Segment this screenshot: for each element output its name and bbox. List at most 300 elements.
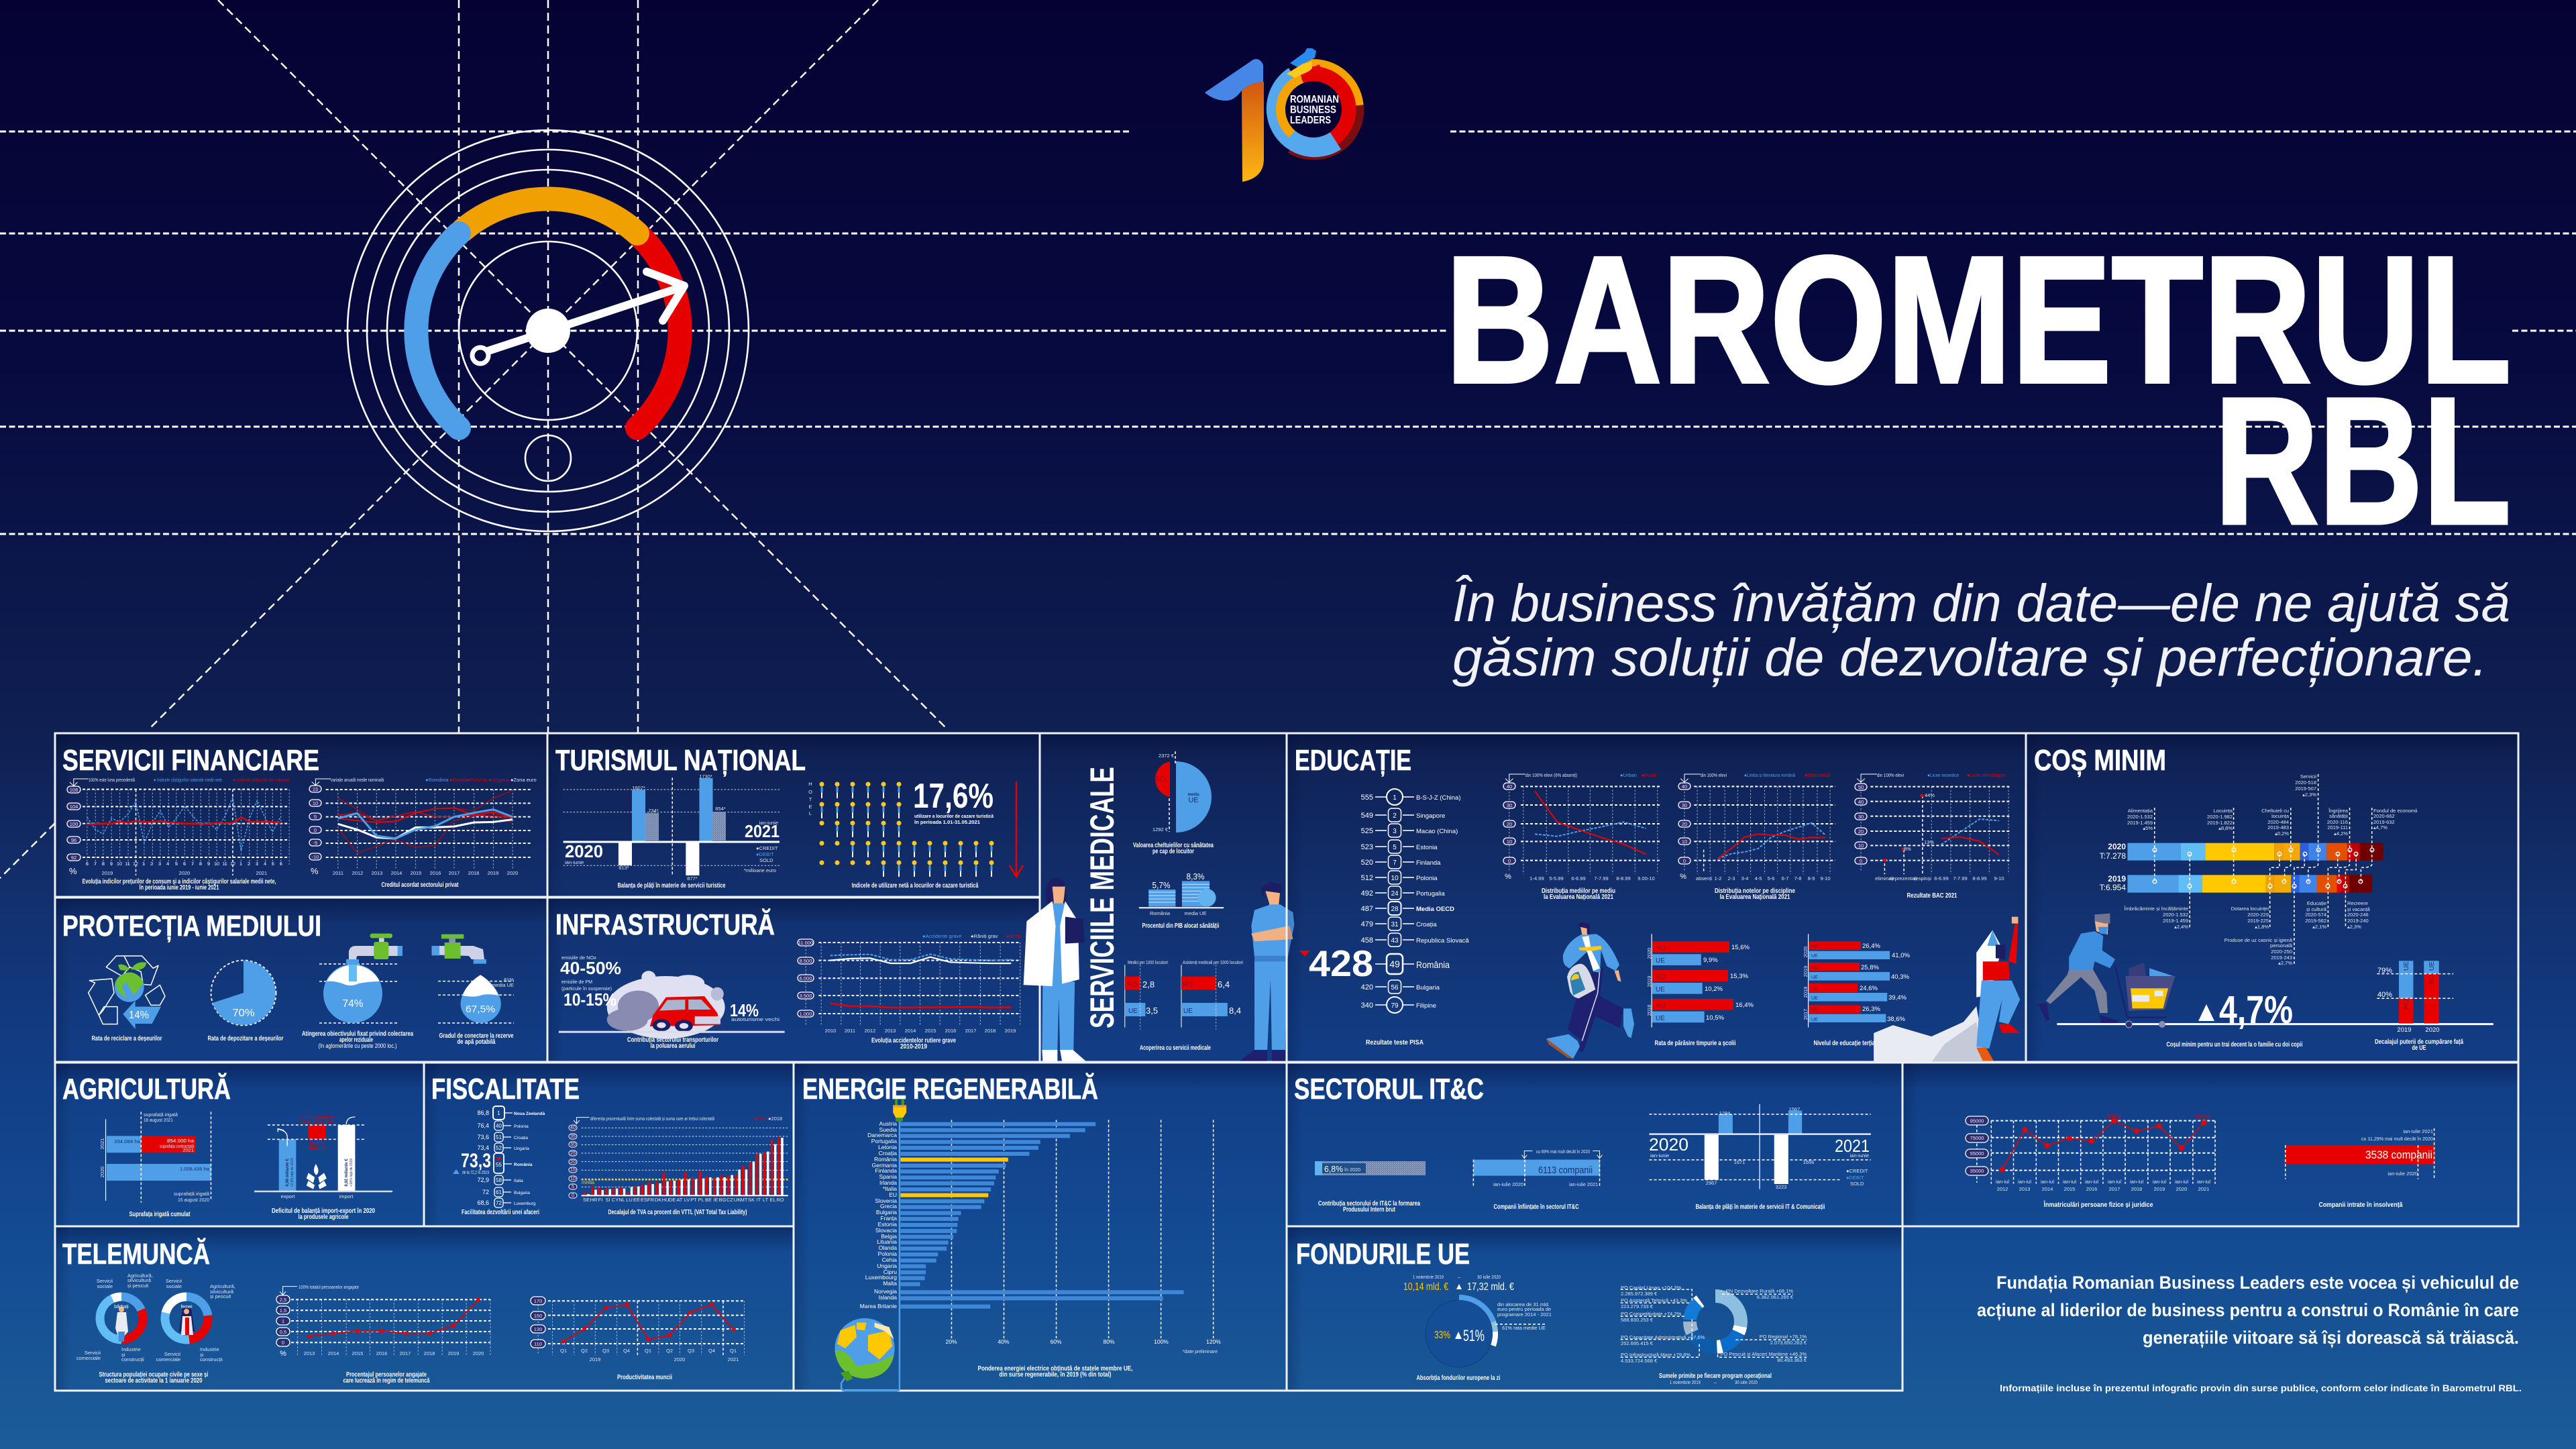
bar chart: renewable share: Croația [879, 1150, 897, 1157]
ranking: PISA results: 3 [1393, 828, 1397, 835]
donut chart: women [99, 1278, 235, 1385]
bar chart: renewable share: Marea Britanie [860, 1303, 897, 1309]
line chart: teleworking share [276, 1284, 490, 1385]
big figure 4,7%: 4,7% [2219, 988, 2293, 1032]
bar chart: irrigated area: 2021 [99, 1138, 105, 1149]
line chart: teleworking share: 2017 [400, 1350, 411, 1356]
bar chart: renewable share: 40% [998, 1338, 1010, 1345]
bar chart: VAT gap: 10 [570, 1175, 576, 1181]
blueprint guide lines [0, 0, 2576, 878]
donut chart: operational programs: 6.362.061.265 € [1757, 1294, 1794, 1300]
bar chart: renewable share: Irlanda [879, 1179, 897, 1186]
line chart: registrations: ian-iul [2041, 1179, 2054, 1185]
line chart: road accidents: 2012 [865, 1028, 875, 1034]
line chart: credit: 5 [314, 814, 317, 820]
line chart: credit: Creditul acordat sectorului privat [381, 881, 459, 889]
footer statement [1977, 1273, 2519, 1348]
bar chart: irrigated area: suprafață irigată [174, 1191, 210, 1197]
water drop: drinking water 67.5%: de apă potabilă [458, 1038, 496, 1046]
hatched bar: GDP contribution: Contribuția sectorului de IT&C la formarea [1318, 1199, 1420, 1208]
line chart: grades by discipline: din 100% elevi [1701, 772, 1727, 778]
donut chart: men: comerciale [76, 1355, 101, 1361]
ranking: ease of doing business: 73,4 [477, 1144, 489, 1151]
bar chart: renewable share: 80% [1103, 1338, 1115, 1345]
bar chart: irrigated area: suprafața contractată [160, 1143, 195, 1149]
line chart: BAC results: ●Licee tehnologice [1967, 772, 2006, 778]
donut chart: women: silvicultură [210, 1289, 234, 1295]
half-pie chart: health spending: media [1187, 793, 1199, 797]
line chart: credit: 2017 [449, 870, 460, 876]
bar chart: IT balance of payments: 1671 [1734, 1159, 1745, 1165]
bar chart: purchasing power gap: UE [2403, 961, 2410, 971]
illustration: shopper with cart [2038, 914, 2493, 1028]
line chart: prices and wages: 10 [214, 861, 219, 867]
line chart: grades by discipline [1678, 772, 1835, 901]
line chart: road accidents: ●Morți [1006, 933, 1021, 939]
ranking: ease of doing business: 72 [482, 1189, 489, 1195]
bar chart: VAT gap: ●2012 [755, 1116, 769, 1122]
line chart: credit: 15 [313, 786, 318, 792]
line chart: grades by discipline: 7-8 [1794, 875, 1801, 881]
ranking: PISA results: Singapore [1416, 812, 1445, 820]
half-pie chart: health spending: UE [1188, 796, 1199, 804]
ranking: ease of doing business: Ungaria [514, 1146, 529, 1151]
line chart: BAC results: 13% [1924, 839, 1934, 845]
stacked bars: minimum basket: 2019-111 [2327, 824, 2348, 830]
line chart: teleworking share: 1 [282, 1318, 284, 1324]
bar chart: balance of tourism payments: Balanța de plăți în materie de servicii turistice [617, 881, 726, 890]
bar chart: renewable share: Grecia [880, 1203, 897, 1210]
stacked bars: minimum basket: ▴0,2% [2275, 830, 2289, 837]
line chart: registrations: ian-iul [2018, 1179, 2031, 1185]
stacked bars: minimum basket: 2020-116 [2327, 819, 2348, 825]
bar chart: balance of tourism payments: 1607* [632, 785, 645, 791]
bar chart: renewable share: *date preliminare [1183, 1348, 1218, 1354]
bar chart: early school leaving: RO [1656, 973, 1666, 981]
line chart: grades by discipline: % [1680, 873, 1686, 881]
line chart: national evaluation averages: 10 [1507, 839, 1512, 845]
bar chart: irrigated area: 18 august 2021 [144, 1117, 173, 1123]
line chart: teleworking share: 100% totalul persoanelor angajate [299, 1284, 359, 1290]
stacked bars: minimum basket: ▴2,1% [2312, 924, 2326, 930]
line chart: road accidents: 2014 [905, 1028, 916, 1034]
line chart: road accidents: Evoluția accidentelor rutiere grave [871, 1036, 956, 1044]
bar chart: VAT gap: ES [641, 1197, 647, 1203]
gauge donut: EU funds absorption: 51% [1463, 1327, 1485, 1345]
line chart: registrations: 2017 [2109, 1186, 2120, 1192]
heading: INFRASTRUCTURĂ [555, 908, 775, 941]
subtitle: În business învățăm din date—ele ne ajută să [1452, 573, 2510, 633]
water drop: drinking water 67.5%: media UE [492, 982, 514, 988]
bar chart: VAT gap: CY [612, 1197, 619, 1203]
stacked bars: minimum basket: 2020-1.532 [2127, 814, 2153, 820]
donut chart: operational programs: 1 noiembrie 2019 [1670, 1379, 1701, 1385]
bar chart: purchasing power gap: UE [2428, 961, 2436, 971]
line chart: prices and wages: 7 [191, 861, 194, 867]
bar chart: renewable share: 60% [1050, 1338, 1062, 1345]
ranking: PISA results: 555 [1361, 794, 1373, 802]
illustration: polluting car: emisiile de PM [561, 979, 592, 985]
stacked bars: minimum basket: locuința [2271, 813, 2290, 819]
gauge donut: EU funds absorption: 10,14 mld. € [1403, 1281, 1448, 1293]
bar chart: balance of tourism payments: ●CREDIT [756, 845, 778, 851]
donut chart: operational programs: PO Regional +78,1% [1760, 1334, 1807, 1340]
ranking: ease of doing business: Croația [514, 1136, 528, 1140]
footer statement: generațiile viitoare să își dorească să trăiască. [2143, 1328, 2519, 1348]
bar chart: VAT gap: HR [590, 1197, 598, 1203]
bar chart: VAT gap: 40 [570, 1124, 576, 1130]
bar chart: IT balance of payments: 3223 [1776, 1184, 1786, 1190]
bar chart: tertiary education: 38,6% [1887, 1016, 1905, 1023]
panel: Telemunca [55, 1226, 794, 1391]
bar chart: purchasing power gap: RO [2428, 974, 2436, 985]
line chart: road accidents: 3.500 [800, 993, 812, 999]
donut chart: operational programs: PO Competitivitate +74,2% [1621, 1311, 1682, 1317]
pictogram: hotel keys: T [809, 796, 812, 802]
bar chart: IT balance of payments: 1567 [1789, 1106, 1800, 1112]
donut chart: women: sociale [166, 1283, 182, 1289]
line chart: prices and wages: 12 [133, 861, 138, 867]
line chart: prices and wages: 2021 [256, 870, 267, 876]
bar chart: VAT gap: SE [583, 1197, 590, 1203]
ranking: PISA results: 458 [1361, 936, 1373, 945]
bar chart: tertiary education: UE [1811, 1018, 1818, 1022]
icon: recycling globe [89, 956, 165, 1042]
donut chart: operational programs: 30 iulie 2020 [1735, 1379, 1758, 1385]
line chart: grades by discipline: 40 [1682, 784, 1687, 790]
line chart: prices and wages: 108 [70, 787, 78, 793]
line chart: grades by discipline: 30 [1682, 802, 1687, 808]
bar chart: renewable share: Polonia [878, 1250, 897, 1257]
bar chart: IT balance of payments: SOLD [1850, 1181, 1864, 1187]
line chart: teleworking share: 2018 [424, 1350, 435, 1356]
bar chart: renewable share: Bulgaria [876, 1209, 897, 1216]
subtitle [1452, 573, 2510, 688]
gauge donut: EU funds absorption: 1 noiembrie 2019 [1413, 1274, 1444, 1280]
ranking: PISA results: 520 [1361, 859, 1373, 867]
line chart: national evaluation averages: din 100% elevi (6% absenți) [1525, 772, 1577, 778]
illustration: rocket woman [1874, 917, 2020, 1062]
bar chart: renewable share: Estonia [878, 1221, 897, 1228]
bar chart: early school leaving: 2020 [1646, 948, 1652, 959]
donut chart: operational programs: Sumele primite pe fiecare program operațional [1659, 1372, 1772, 1380]
logo RBL 10: LEADERS [1290, 115, 1331, 126]
line chart: prices and wages: 4 [264, 861, 266, 867]
stacked bars: minimum basket: 2020-662 [2373, 813, 2395, 819]
bar chart: VAT gap: 0 [572, 1192, 574, 1198]
bar chart: VAT gap: 15 [570, 1167, 576, 1173]
line chart: registrations: ian-iul [2175, 1179, 2188, 1185]
ranking: PISA results: 2 [1393, 812, 1397, 820]
gauge donut: EU funds absorption: euro pentru perioada de [1497, 1306, 1551, 1312]
bar: new companies: ian-iulie 2021 [1569, 1181, 1598, 1187]
stacked bars: minimum basket: 2020-1.532 [2163, 912, 2188, 918]
bar chart: balance of tourism payments: *milioane euro [744, 867, 776, 873]
line chart: registrations: ian-iul [1996, 1179, 2009, 1185]
illustration: male nurse [1240, 882, 1294, 1061]
donut chart: women: și pescuit [210, 1293, 231, 1299]
bar chart: import-export deficit: Deficitul de balanță import-export în 2020 [272, 1207, 375, 1215]
stacked bars: minimum basket: ▴5% [2143, 825, 2153, 831]
donut chart: operational programs: PN Dezvoltare Rurală +68,1% [1726, 1288, 1793, 1294]
ranking: ease of doing business: Polonia [514, 1124, 529, 1129]
bar chart: VAT gap: MT [741, 1197, 748, 1203]
ranking: PISA results: 523 [1361, 843, 1373, 851]
line chart: labour productivity [531, 1297, 745, 1381]
ranking: ease of doing business: 55 [496, 1162, 502, 1168]
gauge red arc [637, 233, 680, 428]
bar chart: early school leaving: 9,9% [1703, 957, 1718, 964]
line chart: road accidents: 2017 [965, 1028, 976, 1034]
bar chart: balance of tourism payments [564, 773, 780, 890]
bar chart: early school leaving: 10,5% [1706, 1014, 1724, 1022]
line chart: BAC results: 30 [1858, 814, 1864, 820]
bar chart: renewable share: Cehia [882, 1256, 897, 1263]
line chart: prices and wages: 3 [158, 861, 161, 867]
pie chart: landfill rate: 70% [232, 1008, 255, 1019]
water drop: waste water 74%: 74% [342, 998, 364, 1010]
stacked bars: minimum basket: Recreere [2347, 900, 2368, 906]
icon: coin stacks GDP share: 5,7% [1152, 880, 1171, 890]
donut chart: men: sociale [97, 1283, 113, 1289]
donut chart: women: femei [180, 1305, 193, 1309]
line chart: labour productivity: Q2 [666, 1348, 673, 1354]
bar chart: import-export deficit: la produsele agricole [298, 1213, 349, 1221]
bar chart: VAT gap: 25 [570, 1150, 576, 1156]
line chart: national evaluation averages: 6-6.99 [1571, 875, 1586, 881]
stacked bars: minimum basket: 2019-243 [2271, 955, 2292, 961]
pictogram: hotel keys: Indicele de utilizare netă a locurilor de cazare turistică [852, 881, 979, 890]
gauge rings [347, 130, 749, 531]
stacked bars: minimum basket: 2020-1.982 [2207, 814, 2233, 820]
ranking: ease of doing business: 52 [496, 1145, 502, 1151]
source note: Informațiile incluse în prezentul infografic provin din surse publice, conform celor indicate în Barometrul RBL. [2000, 1383, 2522, 1393]
line chart: teleworking share: 2014 [328, 1350, 339, 1356]
bar chart: import-export deficit: 6,99 miliarde € [286, 1159, 290, 1187]
gauge donut: EU funds absorption: programare 2014 - 2021 [1497, 1311, 1552, 1318]
bar chart: IT balance of payments: Balanța de plăți în materie de servicii IT & Comunicații [1696, 1203, 1825, 1211]
water drop: drinking water 67.5% [432, 934, 514, 1046]
line chart: teleworking share: % [280, 1350, 286, 1358]
bar chart: VAT gap: LV [684, 1197, 690, 1203]
pictogram: hotel keys: în perioada 1.01-31.05.2021 [914, 819, 980, 825]
bar chart: irrigated area [99, 1112, 211, 1218]
donut chart: operational programs: 252.695.415 € [1621, 1340, 1654, 1346]
panel: Inmatriculari si insolventa [1902, 1063, 2518, 1226]
stacked bars: minimum basket: ▴2,4% [2174, 924, 2188, 930]
bar chart: import-export deficit: +2,9% față de 2019 [290, 1158, 294, 1187]
line chart: prices and wages: 3 [256, 861, 258, 867]
ranking: PISA results: 56 [1391, 984, 1399, 991]
line chart: labour productivity: Q4 [708, 1348, 715, 1354]
bar chart: renewable share: Slovacia [875, 1227, 897, 1234]
line chart: national evaluation averages: 40 [1507, 784, 1512, 790]
stacked bars: minimum basket [2100, 773, 2418, 966]
line chart: prices and wages: ● Indicele prețurilor de consum [233, 777, 289, 783]
line chart: teleworking share: 2,5 [280, 1297, 286, 1303]
line chart: credit: 10 [313, 800, 318, 806]
ranking: ease of doing business: Italia [514, 1179, 523, 1183]
bar chart: irrigated area: 1.008.436 ha [180, 1166, 210, 1172]
bar chart: VAT gap: CZ [727, 1197, 733, 1203]
donut chart: operational programs: 80.493.363 € [1777, 1357, 1807, 1363]
donut chart: operational programs: PO Infrastructură Mare +79,8% [1621, 1352, 1690, 1358]
ranking: PISA results: Portugalia [1416, 890, 1445, 898]
hatched bar: GDP contribution: 6,8% [1324, 1164, 1343, 1174]
bar chart: irrigated area: 15 august 2020 [178, 1197, 209, 1203]
water drop: waste water 74%: Atingerea obiectivului fixat privind colectarea [302, 1030, 413, 1038]
ranking: ease of doing business: România [514, 1163, 533, 1167]
line chart: prices and wages: 9 [207, 861, 210, 867]
main title: RBL [2214, 360, 2511, 562]
ranking: ease of doing business: 40 [496, 1123, 502, 1129]
line chart: credit: 2015 [411, 870, 421, 876]
bar chart: medical coverage: Medici per 1000 locuitori [1128, 959, 1168, 965]
stacked bars: minimum basket: Cheltuieli cu [2261, 808, 2289, 814]
bar chart: early school leaving: UE [1656, 957, 1665, 965]
line chart: prices and wages: 8 [199, 861, 202, 867]
heading: TURISMUL NAȚIONAL [555, 744, 806, 777]
line chart: credit: 2019 [488, 870, 498, 876]
bar chart: IT balance of payments: ●DEBIT [1846, 1175, 1864, 1181]
line chart: labour productivity: 110 [534, 1341, 542, 1347]
icon: recycling globe: Rata de reciclare a deșeurilor [91, 1034, 162, 1042]
panel: Sectorul IT&C [1287, 1063, 1902, 1226]
bar chart: early school leaving [1646, 934, 1754, 1047]
stacked bars: minimum basket: 2020 [2108, 842, 2126, 851]
bar chart: irrigated area: 2020 [99, 1167, 105, 1177]
gauge donut: EU funds absorption: 33% [1434, 1330, 1450, 1341]
heading: COȘ MINIM [2034, 744, 2166, 777]
line chart: labour productivity: Q4 [623, 1348, 630, 1354]
bar chart: renewable share: Letonia [878, 1144, 897, 1150]
bar chart: early school leaving: RO [1656, 945, 1666, 952]
line chart: national evaluation averages: ●Rural [1642, 772, 1657, 778]
line chart: credit: ●Grecia [449, 777, 468, 783]
line chart: credit: -10 [312, 854, 319, 860]
line chart: prices and wages: 10 [117, 861, 122, 867]
donut chart: women: Servicii [164, 1351, 180, 1357]
ranking: PISA results: 79 [1391, 1002, 1399, 1010]
ranking: ease of doing business: 86,8 [477, 1110, 489, 1116]
bar chart: import-export deficit: 1,937 miliarde € [299, 1116, 334, 1120]
donut chart: men: și [121, 1352, 125, 1358]
line chart: BAC results: 40 [1858, 799, 1864, 805]
line chart: BAC results: ●Licee teoretice [1927, 772, 1959, 778]
bar chart: VAT gap: BG [719, 1197, 727, 1203]
ranking: PISA results: 31 [1391, 921, 1399, 928]
bar chart: import-export deficit: +16% față de 2019 [350, 1159, 354, 1187]
line chart: grades by discipline: Distribuția notelor pe discipline [1715, 887, 1795, 895]
illustration: female doctor [1024, 877, 1085, 1061]
line chart: BAC results: eliminați [1875, 875, 1894, 881]
line chart: road accidents: 2019 [1005, 1028, 1016, 1034]
line chart: prices and wages: 2020 [179, 870, 190, 876]
panel: Protectia mediului [55, 898, 547, 1062]
bar chart: tertiary education [1803, 934, 1927, 1047]
ranking: PISA results: 340 [1361, 1002, 1373, 1010]
donut chart: men: Servicii [97, 1278, 113, 1284]
ranking: PISA results: Filipine [1416, 1002, 1436, 1010]
water drop: waste water 74% [302, 934, 413, 1049]
bar chart: tertiary education: RO [1811, 945, 1819, 949]
illustration: polluting car [559, 955, 785, 1050]
bar chart: purchasing power gap [2375, 961, 2463, 1052]
bar chart: VAT gap: EE [633, 1197, 640, 1203]
line chart: prices and wages: 100% este luna precedentă [89, 777, 136, 783]
bar chart: irrigated area: Suprafața irigată cumulat [129, 1210, 191, 1218]
water drop: waste water 74%: apelor reziduale [339, 1036, 373, 1044]
line chart: registrations: 2012 [1997, 1186, 2008, 1192]
ranking: PISA results: 428 [1309, 943, 1373, 984]
bar chart: balance of tourism payments: ●DEBIT [756, 851, 774, 857]
bar chart: balance of tourism payments: SOLD [759, 857, 773, 863]
line chart: teleworking share: 2015 [352, 1350, 363, 1356]
line chart: labour productivity: 170 [534, 1298, 542, 1304]
heading: EDUCAȚIE [1295, 744, 1411, 777]
line chart: prices and wages: 12 [230, 861, 235, 867]
half-pie chart: health spending: 2372 € [1159, 753, 1175, 759]
ranking: PISA results: 549 [1361, 812, 1373, 820]
stacked bars: minimum basket: și vacanță [2347, 906, 2371, 912]
donut chart: women: construcții [200, 1356, 223, 1362]
line chart: road accidents: 2013 [885, 1028, 896, 1034]
ranking: ease of doing business: 76,4 [477, 1122, 489, 1129]
bar chart: renewable share: Danemarca [867, 1132, 897, 1138]
pictogram: hotel keys: H [808, 781, 812, 787]
bar chart: balance of tourism payments: 2020 [565, 841, 603, 861]
bar chart: balance of tourism payments: 1730* [699, 773, 712, 780]
pictogram: hotel keys: utilizare a locurilor de cazare turistică [914, 813, 994, 819]
stacked bars: minimum basket: 2019 [2108, 874, 2126, 883]
donut chart: operational programs: 4.533.724.568 € [1621, 1358, 1658, 1364]
line chart: national evaluation averages: 30 [1507, 802, 1512, 808]
line chart: prices and wages: 8 [102, 861, 105, 867]
bar chart: purchasing power gap: 2019 [2397, 1026, 2412, 1034]
ranking: PISA results: 512 [1361, 874, 1373, 882]
line chart: labour productivity: Q3 [602, 1348, 609, 1354]
stacked bars: minimum basket: 2019-225 [2247, 918, 2269, 924]
bar chart: tertiary education: RO [1811, 966, 1819, 971]
bar chart: VAT gap: LU [626, 1197, 633, 1203]
line chart: BAC results: din 100% elevi [1877, 772, 1904, 778]
line chart: labour productivity: 2020 [674, 1356, 685, 1362]
line chart: grades by discipline: ●Limba și literatura română [1744, 772, 1796, 778]
line chart: registrations [1966, 1114, 2215, 1209]
bar chart: renewable share: Ungaria [877, 1263, 897, 1269]
stacked bars: minimum basket: Locuința [2214, 808, 2233, 814]
ranking: ease of doing business: 68,6 [477, 1199, 489, 1206]
line chart: teleworking share: 2013 [304, 1350, 315, 1356]
stacked bars: minimum basket: 2020-229 [2247, 912, 2269, 918]
heading: AGRICULTURĂ [62, 1072, 231, 1106]
line chart: road accidents: 2010-2019 [900, 1042, 927, 1051]
stacked bars: minimum basket: Educație [2307, 900, 2326, 906]
bar chart: tertiary education: 41,0% [1892, 952, 1910, 959]
ranking: ease of doing business: 51 [496, 1134, 502, 1140]
line chart: labour productivity: Q1 [560, 1348, 567, 1354]
line chart: credit: 0 [314, 827, 317, 833]
bar chart: tertiary education: 25,8% [1861, 964, 1879, 971]
line chart: prices and wages: 4 [166, 861, 169, 867]
bar chart: VAT gap: BE [705, 1197, 712, 1203]
ranking: PISA results: Macao (China) [1416, 828, 1458, 835]
line chart: registrations: 2016 [2086, 1186, 2097, 1192]
icon: coin stacks GDP share: media UE [1185, 910, 1206, 916]
ranking: PISA results: 24 [1391, 890, 1399, 898]
ranking: PISA results: Rezultate teste PISA [1366, 1038, 1424, 1046]
line chart: road accidents: 2011 [845, 1028, 855, 1034]
